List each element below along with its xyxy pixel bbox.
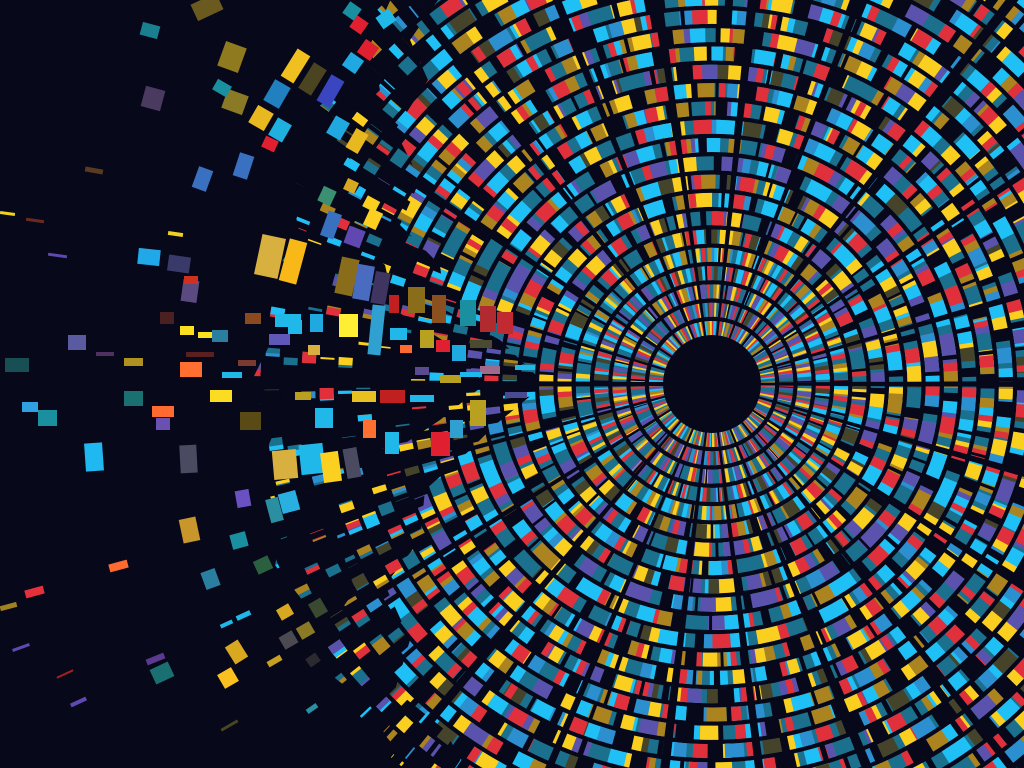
scattered fragments: upper left [85,0,397,248]
dissolve mask: outer left edge breaks apart [191,0,536,768]
central hole [664,336,760,432]
scattered fragments: mid left [0,211,535,483]
scattered fragments: lower left [0,442,328,732]
